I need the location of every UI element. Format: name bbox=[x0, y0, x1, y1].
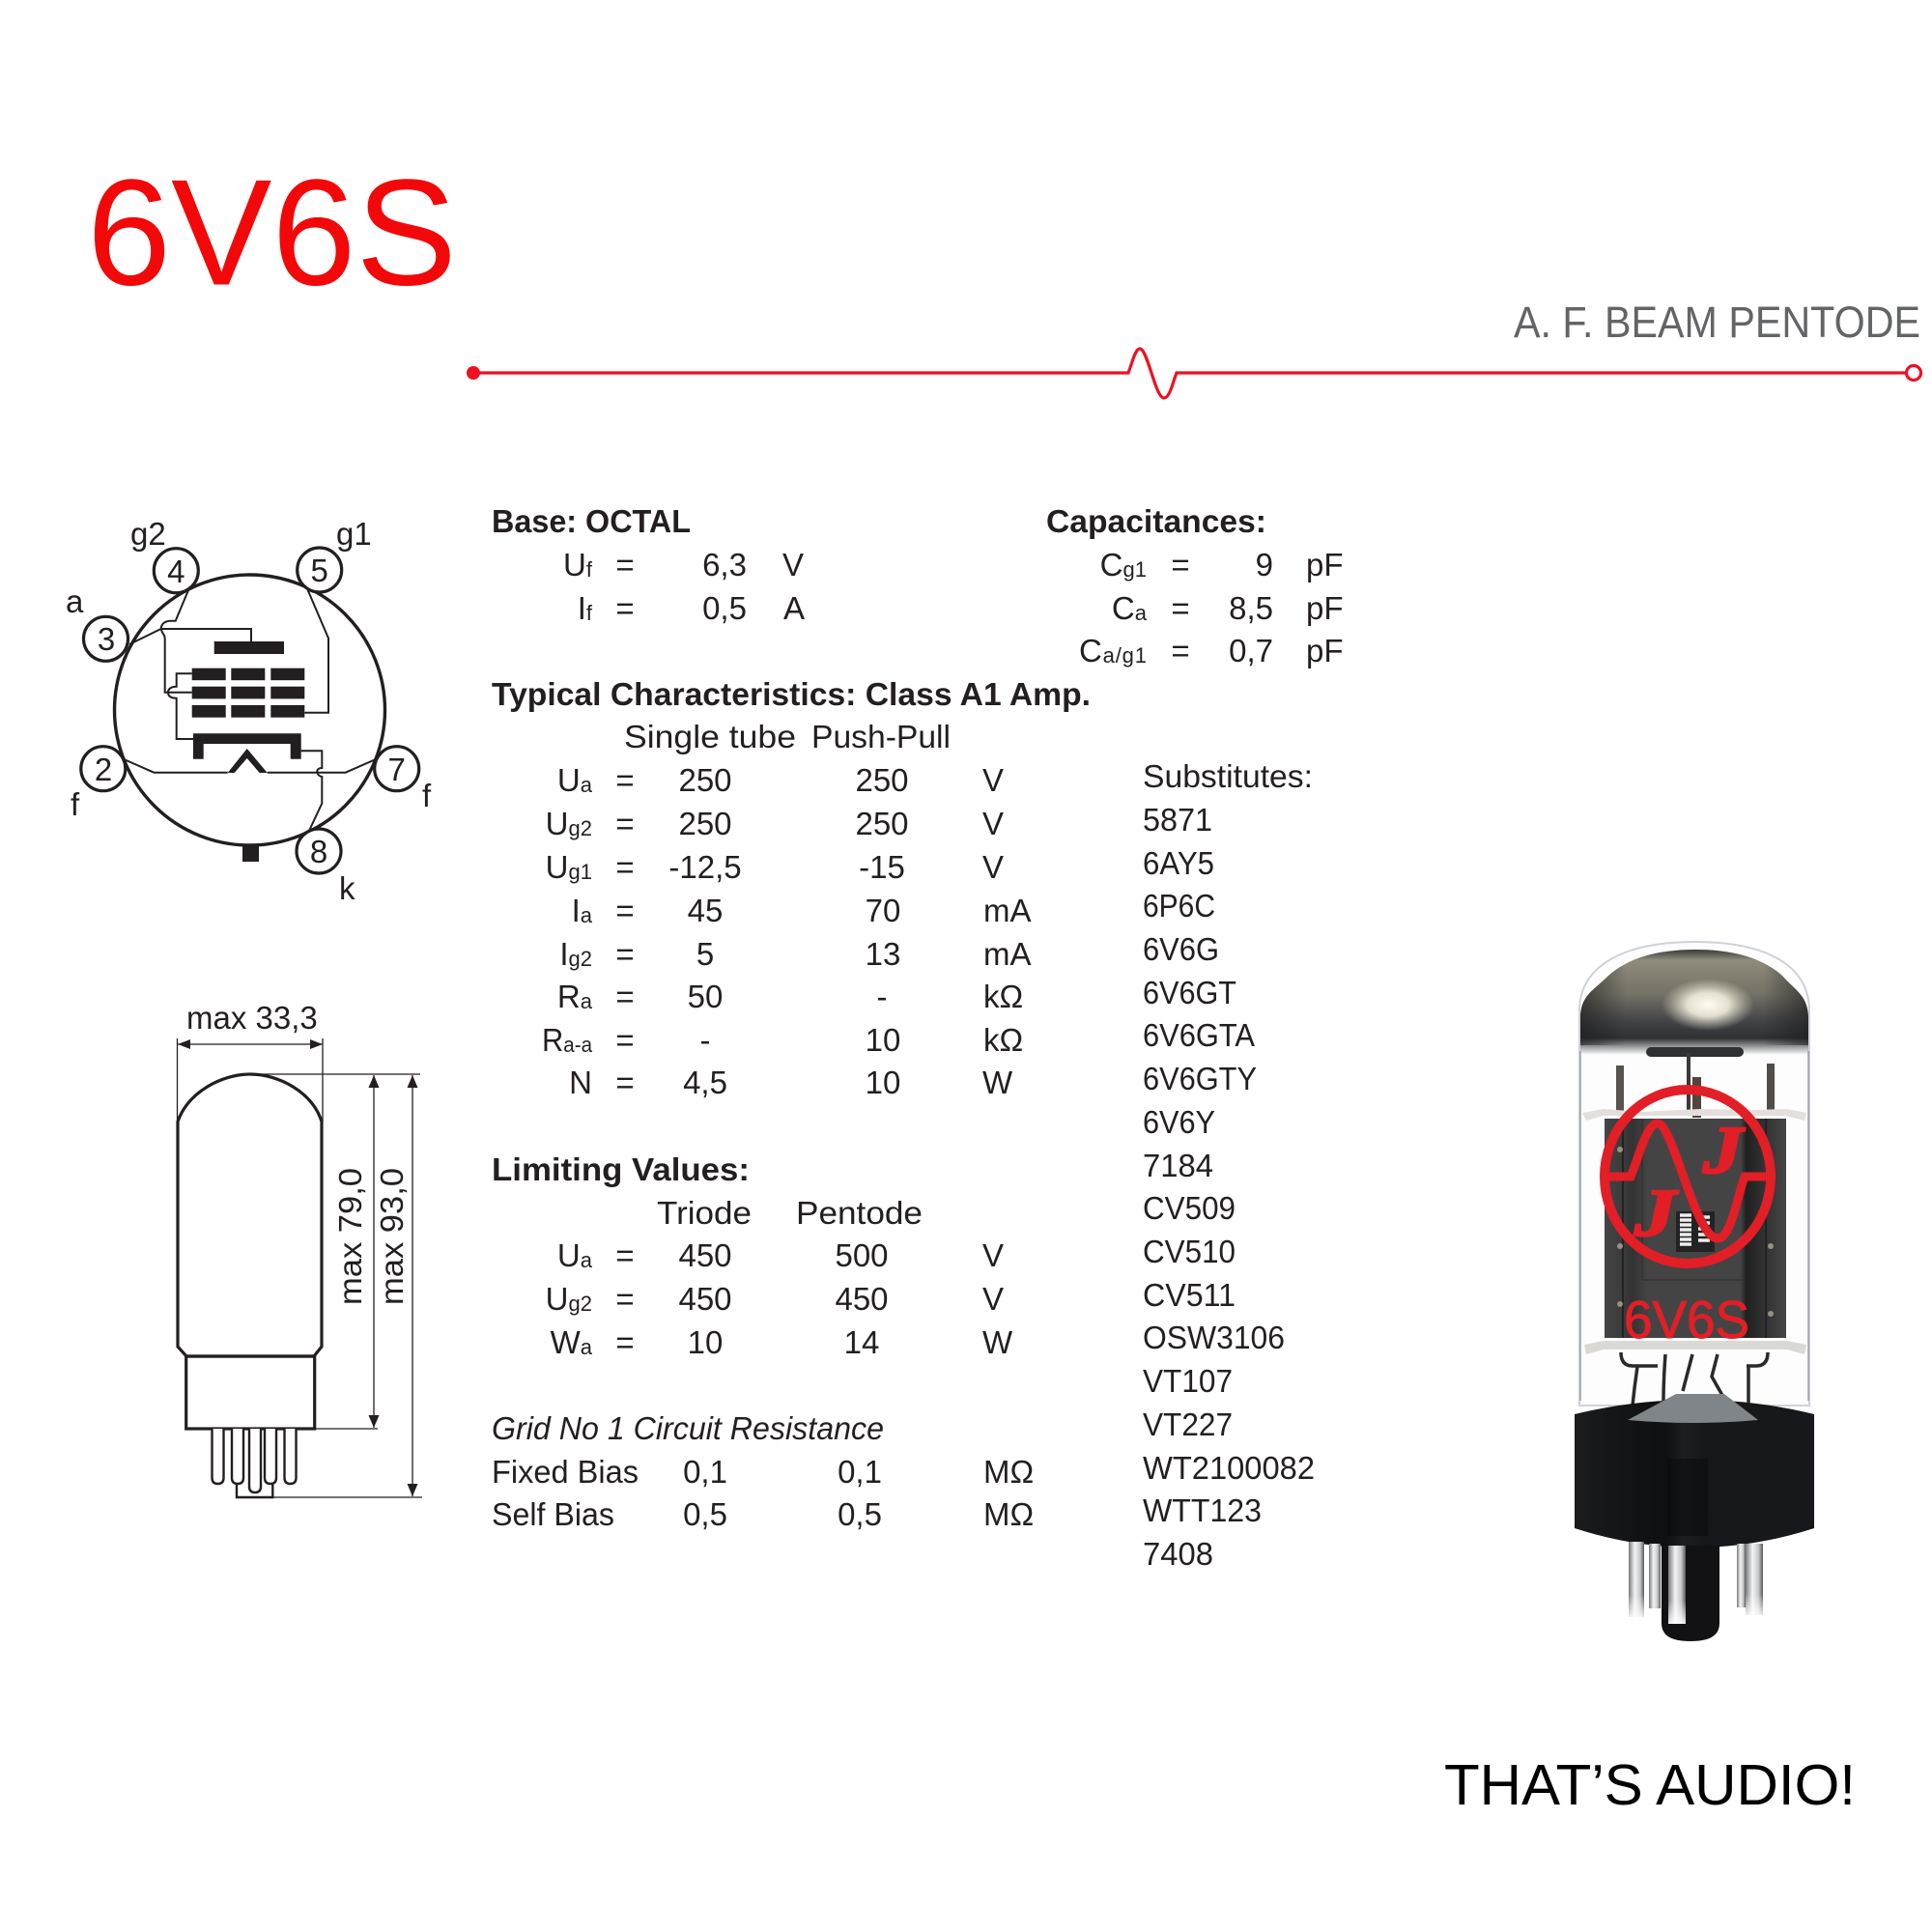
pin numbers: 2 bbox=[95, 752, 112, 787]
anode plate bbox=[1605, 1119, 1786, 1338]
substitutes list: VT107 bbox=[1143, 1363, 1233, 1399]
row: Wa: a bbox=[581, 1335, 593, 1359]
row: Ra-a: 10 bbox=[866, 1022, 900, 1058]
row: Ug2: = bbox=[615, 806, 635, 841]
glass envelope bbox=[1579, 942, 1809, 1406]
row: Cg1 bbox=[1100, 547, 1344, 582]
column headers: Single tube bbox=[624, 719, 796, 754]
pin function labels: g2 bbox=[130, 516, 166, 552]
row: Ua: V bbox=[982, 1237, 1004, 1273]
row: Cg1: g1 bbox=[1123, 557, 1147, 582]
row: Ra: a bbox=[581, 989, 593, 1013]
pinout diagram bbox=[66, 516, 432, 906]
tube photograph bbox=[1575, 942, 1814, 1641]
row: Ug2: U bbox=[546, 1281, 569, 1317]
substitutes list: CV510 bbox=[1143, 1234, 1236, 1269]
row: N: = bbox=[615, 1065, 635, 1100]
row: Wa bbox=[551, 1324, 1013, 1360]
JJ logo: J bbox=[1634, 1177, 1678, 1251]
dimension: width: max 33,3 bbox=[186, 1000, 318, 1036]
pins bbox=[213, 1429, 296, 1497]
row: Ra bbox=[557, 979, 1023, 1014]
row: Ca: pF bbox=[1306, 590, 1344, 626]
row: self bias: MΩ bbox=[983, 1496, 1034, 1532]
row: Ra: 50 bbox=[688, 979, 723, 1014]
row: Cg1: C bbox=[1100, 547, 1123, 582]
row: Ua bbox=[557, 1237, 1004, 1273]
row: N: W bbox=[982, 1065, 1013, 1100]
substitutes list: 6V6G bbox=[1143, 931, 1219, 967]
heading: typical characteristics: Typical Characteristics: Class A1 Amp. bbox=[492, 676, 1091, 712]
row: Ug1: V bbox=[982, 849, 1004, 885]
substitutes list: 6P6C bbox=[1143, 888, 1215, 923]
row: fixed bias: 0,1 bbox=[683, 1454, 727, 1490]
row: Wa: = bbox=[615, 1324, 635, 1360]
lead wires bbox=[1621, 1352, 1768, 1406]
pin function labels: f bbox=[422, 778, 432, 813]
substitutes list: CV509 bbox=[1143, 1190, 1236, 1226]
row: self bias: 0,5 bbox=[683, 1496, 727, 1532]
substitutes list: 5871 bbox=[1143, 802, 1212, 838]
row: If: = bbox=[615, 590, 635, 626]
row: Ug2: V bbox=[982, 1281, 1004, 1317]
typical characteristics table bbox=[492, 676, 1091, 1100]
electrode: anode plate bbox=[214, 641, 284, 654]
substitutes list: Substitutes: bbox=[1143, 758, 1313, 794]
tube body bbox=[178, 1074, 322, 1356]
row: Ia: a bbox=[581, 903, 593, 927]
pin function labels: a bbox=[66, 583, 84, 619]
substitutes list: 6V6GTA bbox=[1143, 1017, 1255, 1053]
row: Ua: = bbox=[615, 762, 635, 798]
upper mica spacer bbox=[1582, 1109, 1806, 1121]
row: Ua: U bbox=[557, 1237, 581, 1273]
row: If: f bbox=[586, 601, 593, 625]
pin numbers: 5 bbox=[311, 553, 328, 588]
column headers: Push-Pull bbox=[811, 719, 951, 754]
row: N: N bbox=[569, 1065, 592, 1100]
row: Wa: 10 bbox=[688, 1324, 723, 1360]
heading: capacitances: Capacitances: bbox=[1046, 503, 1266, 539]
row: Ug2: U bbox=[546, 806, 569, 841]
row: self bias: 0,5 bbox=[838, 1496, 882, 1532]
heading: base: Base: OCTAL bbox=[492, 503, 691, 539]
substitutes list: 6AY5 bbox=[1143, 845, 1214, 881]
pin numbers: 3 bbox=[98, 621, 115, 657]
row: Cg1: pF bbox=[1306, 547, 1344, 582]
row: Ra-a: R bbox=[542, 1022, 565, 1058]
row: N: 4,5 bbox=[683, 1065, 727, 1100]
row: Ia bbox=[572, 893, 1032, 928]
row: Ug1: = bbox=[615, 849, 635, 885]
pin numbers: 4 bbox=[167, 554, 185, 589]
electrode: cathode bbox=[193, 733, 301, 759]
row: Wa: 14 bbox=[844, 1324, 879, 1360]
glass edge shading bbox=[1580, 1051, 1808, 1401]
support rods bbox=[1616, 1053, 1775, 1118]
row: Ug2: 450 bbox=[835, 1281, 889, 1317]
row: Ua: 450 bbox=[678, 1237, 732, 1273]
top mica disc bbox=[1646, 1047, 1744, 1057]
heading: limiting values: Limiting Values: bbox=[492, 1151, 750, 1187]
row: Ug2: = bbox=[615, 1281, 635, 1317]
row: Ra-a: - bbox=[699, 1022, 711, 1058]
title: 6V6S: 6V6S bbox=[87, 149, 457, 317]
row: fixed bias: 0,1 bbox=[838, 1454, 882, 1490]
pin function labels: g1 bbox=[336, 516, 372, 552]
column headers bbox=[624, 719, 951, 754]
dimension: total height: max 93,0 bbox=[374, 1168, 410, 1305]
row: Ug1: -15 bbox=[859, 849, 905, 885]
row: Uf bbox=[563, 547, 804, 582]
dome shoulder shading bbox=[1580, 950, 1808, 1045]
row: Ia: mA bbox=[983, 893, 1032, 928]
lower mica spacer bbox=[1584, 1341, 1806, 1354]
substitutes list: CV511 bbox=[1143, 1277, 1236, 1313]
row: Ua: U bbox=[557, 762, 581, 798]
row: Ig2: g2 bbox=[569, 947, 592, 971]
row: Uf: V bbox=[782, 547, 804, 582]
row: Ia: I bbox=[572, 893, 581, 928]
row: N bbox=[569, 1065, 1013, 1100]
substitutes list: VT227 bbox=[1143, 1406, 1233, 1442]
row: Ia: = bbox=[615, 893, 635, 928]
capacitances table bbox=[1046, 503, 1344, 668]
row: Ug2: 250 bbox=[678, 806, 732, 841]
row: Ca/g1: = bbox=[1171, 633, 1190, 668]
substitutes list: 6V6Y bbox=[1143, 1104, 1215, 1140]
row: Ra-a: a-a bbox=[563, 1033, 593, 1057]
row: Ra: kΩ bbox=[983, 979, 1023, 1014]
pin numbers: 8 bbox=[310, 834, 327, 869]
tube outline drawing with dimensions bbox=[178, 1000, 422, 1497]
substitutes list: WT2100082 bbox=[1143, 1450, 1315, 1486]
row: Ua: a bbox=[581, 773, 593, 797]
JJ logo bbox=[1605, 1090, 1771, 1264]
base key bbox=[242, 845, 259, 862]
base data table bbox=[492, 503, 805, 626]
row: Ug1: g1 bbox=[569, 860, 592, 884]
row: self bias: Self Bias bbox=[492, 1496, 614, 1532]
row: Ug2: g2 bbox=[569, 1292, 592, 1316]
column headers: Pentode bbox=[796, 1195, 923, 1231]
row: Ca/g1: pF bbox=[1306, 633, 1344, 668]
row: fixed bias: MΩ bbox=[983, 1454, 1034, 1490]
row: Ig2 bbox=[559, 936, 1032, 972]
row: Ug2: 450 bbox=[678, 1281, 732, 1317]
row: If: I bbox=[578, 590, 586, 626]
row: Ca: = bbox=[1171, 590, 1190, 626]
tube envelope circle bbox=[114, 575, 384, 845]
row: Ua: a bbox=[581, 1248, 593, 1272]
row: Ua: 250 bbox=[855, 762, 909, 798]
row: Ra: = bbox=[615, 979, 635, 1014]
substitutes list: 6V6GTY bbox=[1143, 1061, 1257, 1096]
row: fixed bias bbox=[492, 1454, 1034, 1490]
getter dome bbox=[1580, 950, 1808, 1055]
row: Ra: R bbox=[557, 979, 581, 1014]
row: Wa: W bbox=[982, 1324, 1013, 1360]
row: Ua: = bbox=[615, 1237, 635, 1273]
pin numbers bbox=[95, 553, 406, 869]
row: Ug1: -12,5 bbox=[668, 849, 742, 885]
plate rivets and side seams bbox=[1617, 1119, 1774, 1338]
dimension: seated height: max 79,0 bbox=[332, 1168, 368, 1305]
row: Ca: C bbox=[1112, 590, 1135, 626]
row: Ua: 500 bbox=[835, 1237, 889, 1273]
row: Ia: 70 bbox=[866, 893, 900, 928]
row: Ug2: g2 bbox=[569, 816, 592, 840]
row: Ca/g1: a/g1 bbox=[1103, 643, 1147, 668]
row: Wa: W bbox=[551, 1324, 581, 1360]
wiring bbox=[122, 590, 376, 831]
pin function labels: f bbox=[71, 786, 80, 822]
row: Ug2: V bbox=[982, 806, 1004, 841]
row: Ug1: U bbox=[546, 849, 569, 885]
substitutes list: 7408 bbox=[1143, 1536, 1213, 1572]
base highlight bbox=[1667, 1459, 1708, 1536]
row: Cg1: 9 bbox=[1256, 547, 1273, 582]
row: Uf: 6,3 bbox=[702, 547, 747, 582]
row: Ra-a: kΩ bbox=[983, 1022, 1023, 1058]
column headers: Triode bbox=[657, 1195, 752, 1231]
row: Ug2 bbox=[546, 806, 1004, 841]
row: Uf: f bbox=[586, 557, 593, 582]
row: Ig2: = bbox=[615, 936, 635, 972]
electrode: grids bbox=[192, 668, 304, 718]
row: Ig2: 5 bbox=[696, 936, 714, 972]
row: fixed bias: Fixed Bias bbox=[492, 1454, 639, 1490]
socket base bbox=[186, 1356, 315, 1429]
pin circles bbox=[81, 548, 419, 873]
substitutes list: 6V6GT bbox=[1143, 975, 1236, 1010]
row: Ug1 bbox=[546, 849, 1004, 885]
electrode: heater bbox=[228, 749, 268, 773]
row: Ig2: 13 bbox=[866, 936, 900, 972]
pin function labels: k bbox=[339, 870, 355, 906]
row: Ca/g1: C bbox=[1079, 633, 1102, 668]
row: If: 0,5 bbox=[702, 590, 747, 626]
row: Ra: - bbox=[877, 979, 887, 1014]
red signal line with sine break bbox=[467, 349, 1920, 398]
tube print: 6V6S: 6V6S bbox=[1624, 1290, 1749, 1350]
bakelite base bbox=[1575, 1400, 1814, 1548]
dimension lines bbox=[178, 1038, 422, 1497]
row: Ig2: I bbox=[559, 936, 569, 972]
heading: grid circuit resistance: Grid No 1 Circuit Resistance bbox=[492, 1410, 884, 1446]
substitutes list: OSW3106 bbox=[1143, 1320, 1285, 1355]
row: Ca: 8,5 bbox=[1229, 590, 1273, 626]
row: Ca bbox=[1112, 590, 1344, 626]
row: Ca/g1 bbox=[1079, 633, 1344, 668]
row: Ra-a bbox=[542, 1022, 1023, 1058]
row: Ca/g1: 0,7 bbox=[1229, 633, 1273, 668]
row: Ig2: mA bbox=[983, 936, 1032, 972]
substitutes list: 7184 bbox=[1143, 1148, 1213, 1183]
row: If: A bbox=[783, 590, 805, 626]
row: Ua bbox=[557, 762, 1004, 798]
column headers bbox=[657, 1195, 923, 1231]
row: Ug2: 250 bbox=[855, 806, 909, 841]
glass press bbox=[1628, 1394, 1758, 1423]
cathode window bbox=[1676, 1211, 1715, 1252]
row: self bias bbox=[492, 1496, 1034, 1532]
row: Ua: 250 bbox=[678, 762, 732, 798]
grid circuit resistance table bbox=[492, 1410, 1034, 1532]
row: Ug2 bbox=[546, 1281, 1004, 1317]
pin numbers: 7 bbox=[388, 752, 406, 787]
pin function labels bbox=[66, 516, 432, 906]
base pins bbox=[1629, 1542, 1763, 1641]
limiting values table bbox=[492, 1151, 1013, 1360]
getter highlight bbox=[1662, 979, 1754, 1031]
row: Uf: U bbox=[563, 547, 586, 582]
slogan: THAT’S AUDIO! bbox=[1444, 1753, 1856, 1817]
row: Uf: = bbox=[615, 547, 635, 582]
row: Cg1: = bbox=[1171, 547, 1190, 582]
substitutes list: WTT123 bbox=[1143, 1492, 1262, 1528]
row: Ia: 45 bbox=[688, 893, 723, 928]
row: Ua: V bbox=[982, 762, 1004, 798]
row: Ca: a bbox=[1135, 601, 1148, 625]
row: N: 10 bbox=[866, 1065, 900, 1100]
JJ logo: J bbox=[1702, 1114, 1745, 1188]
row: If bbox=[578, 590, 805, 626]
row: Ra-a: = bbox=[615, 1022, 635, 1058]
substitutes list bbox=[1143, 758, 1315, 1572]
